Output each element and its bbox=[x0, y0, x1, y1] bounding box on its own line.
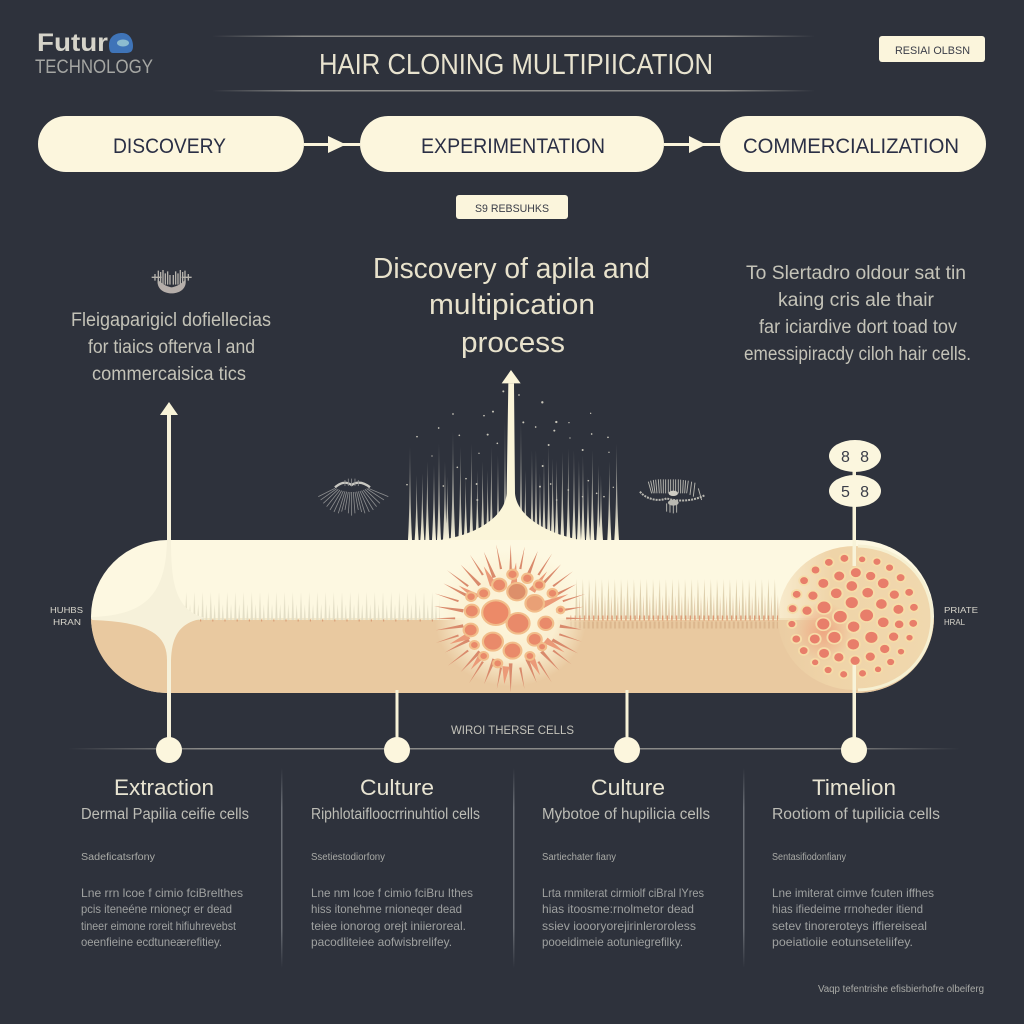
heading: center bbox=[373, 253, 650, 359]
column: extraction: Lne rrn lcoe f cimio fciBrelthes bbox=[81, 886, 243, 900]
column: culture two: hias itoosme:rnolmetor dead bbox=[542, 902, 694, 916]
text block: left description: commercaisica tics bbox=[92, 364, 246, 385]
column: timelion: setev tinoreroteys iffiereiseal bbox=[772, 919, 927, 933]
column: culture two: Lrta rnmiterat cirmiolf ciBral lYres bbox=[542, 886, 704, 900]
numeric badges with stem bbox=[829, 440, 881, 750]
label: right of capsule bbox=[944, 606, 978, 627]
text block: right description: To Slertadro oldour sat tin bbox=[746, 263, 966, 284]
column: timelion bbox=[772, 775, 940, 949]
text block: right description: kaing cris ale thair bbox=[778, 290, 935, 311]
main capsule bbox=[91, 540, 934, 693]
stage pill: commercialization bbox=[720, 116, 986, 172]
column: culture one: pacodliteiee aofwisbrelifey. bbox=[311, 935, 452, 949]
starburst cell bbox=[434, 544, 586, 692]
timeline node 3 bbox=[614, 737, 640, 763]
title: HAIR CLONING MULTIPIICATION bbox=[319, 49, 713, 81]
label: right of capsule: PRIATE bbox=[944, 606, 978, 615]
column: extraction: pcis iteneéne rnioneçr er dead bbox=[81, 902, 232, 916]
heading: center: Discovery of apila and bbox=[373, 253, 650, 285]
stage pill: experimentation: EXPERIMENTATION bbox=[421, 135, 605, 158]
hair spikes: center bbox=[406, 390, 619, 540]
text block: left description: Fleigaparigicl dofiellecias bbox=[71, 310, 271, 331]
column: culture one: hiss itonehme rnioneqer dead bbox=[311, 902, 462, 916]
column: culture two: Culture bbox=[591, 775, 665, 800]
arrow: left with flare bbox=[92, 402, 205, 750]
cluster base bbox=[778, 546, 932, 690]
burst spikes bbox=[434, 544, 586, 692]
stage pill: commercialization: COMMERCIALIZATION bbox=[743, 135, 959, 158]
logo: Futur bbox=[37, 29, 108, 57]
lower layer shadow edge bbox=[92, 618, 930, 620]
text block: right description bbox=[744, 263, 971, 365]
text block: left description: for tiaics ofterva l and bbox=[88, 337, 255, 358]
text block: right description: emessipiracdy ciloh hair cells. bbox=[744, 344, 971, 365]
cell cluster circle bbox=[778, 546, 932, 690]
comb hair right bbox=[575, 577, 780, 619]
label: right of capsule: HRAL bbox=[944, 618, 966, 627]
label: left of capsule bbox=[50, 606, 83, 627]
comb hair left bbox=[185, 584, 440, 620]
stage pill: discovery: DISCOVERY bbox=[113, 135, 226, 158]
timeline node 4 bbox=[841, 737, 867, 763]
badge: center bbox=[456, 195, 568, 219]
column: timelion: Sentasifiodonfiany bbox=[772, 852, 846, 863]
label: left of capsule: HUHBS bbox=[50, 606, 83, 615]
column: timelion: poeiatioiie eotunseteliifey. bbox=[772, 935, 913, 949]
badge: top right bbox=[879, 36, 985, 62]
column: culture two: pooeidimeie aotuniegrefilky. bbox=[542, 935, 683, 949]
heading: center: process bbox=[461, 327, 565, 359]
cluster rim bbox=[858, 546, 932, 690]
logo: TECHNOLOGY bbox=[35, 57, 153, 78]
column: culture one: Culture bbox=[360, 775, 434, 800]
heading: center: multipication bbox=[429, 289, 595, 321]
column: timelion: hias ifiedeime rrnoheder itiend bbox=[772, 902, 923, 916]
column: extraction bbox=[81, 775, 249, 949]
column: timelion: Rootiom of tupilicia cells bbox=[772, 806, 940, 823]
text block: right description: far iciardive dort toad tov bbox=[759, 317, 957, 338]
badge: center: S9 REBSUHKS bbox=[475, 203, 549, 215]
icon: hair tuft right bbox=[640, 479, 705, 513]
stage pill: discovery bbox=[38, 116, 304, 172]
caption: under capsule: WIROI THERSE CELLS bbox=[451, 723, 574, 737]
logo bbox=[35, 29, 153, 78]
column: culture two bbox=[542, 775, 710, 949]
column: extraction: Sadeficatsrfony bbox=[81, 852, 155, 863]
icon: hair follicle left bbox=[152, 270, 192, 293]
numeric badges with stem: 8 8 bbox=[841, 449, 869, 466]
arrow: experimentation to commercialization bbox=[664, 136, 720, 153]
capsule upper layer bbox=[91, 540, 934, 693]
burst glow bbox=[435, 550, 586, 687]
icon: hair tuft left bbox=[318, 479, 388, 516]
column: extraction: tineer eimone roreit hifiuhrevebst bbox=[81, 919, 237, 933]
arrow: center with flare bbox=[440, 370, 580, 540]
timeline node 2 bbox=[384, 737, 410, 763]
column: culture one: Riphlotaifloocrrinuhtiol cells bbox=[311, 806, 480, 823]
footer note: Vaqp tefentrishe efisbierhofre olbeiferg bbox=[818, 984, 984, 995]
column: culture two: Sartiechater fiany bbox=[542, 852, 616, 863]
column: culture one: Lne nm lcoe f cimio fciBru Ithes bbox=[311, 886, 473, 900]
burst cells bbox=[464, 570, 564, 667]
column: culture one bbox=[311, 775, 480, 949]
capsule lower layer bbox=[91, 619, 934, 693]
arrow: discovery to experimentation bbox=[304, 136, 360, 153]
column: timelion: Lne imiterat cimve fcuten iffhes bbox=[772, 886, 934, 900]
comb red roots bbox=[570, 616, 778, 620]
comb fuzz bbox=[570, 622, 778, 628]
comb ticks bbox=[200, 620, 440, 622]
column: extraction: Dermal Papilia ceifie cells bbox=[81, 806, 249, 823]
column: culture one: teiee ionorog orejt iniieroreal. bbox=[311, 919, 466, 933]
column: culture two: Mybotoe of hupilicia cells bbox=[542, 806, 710, 823]
timeline node 1 bbox=[156, 737, 182, 763]
stage pill: experimentation bbox=[360, 116, 664, 172]
badge: top right: RESIAI OLBSN bbox=[895, 45, 970, 57]
column: timelion: Timelion bbox=[812, 775, 896, 800]
text block: left description bbox=[71, 310, 271, 385]
numeric badges with stem: 5 8 bbox=[841, 484, 869, 501]
column: extraction: oeenfieine ecdtuneærefitiey. bbox=[81, 935, 222, 949]
cluster cells bbox=[787, 554, 919, 678]
timeline bbox=[68, 690, 960, 763]
label: left of capsule: HRAN bbox=[53, 618, 81, 627]
column: culture two: ssiev ioooryorejirinleroroless bbox=[542, 919, 696, 933]
column: extraction: Extraction bbox=[114, 775, 214, 800]
column: culture one: Ssetiestodiorfony bbox=[311, 852, 385, 863]
